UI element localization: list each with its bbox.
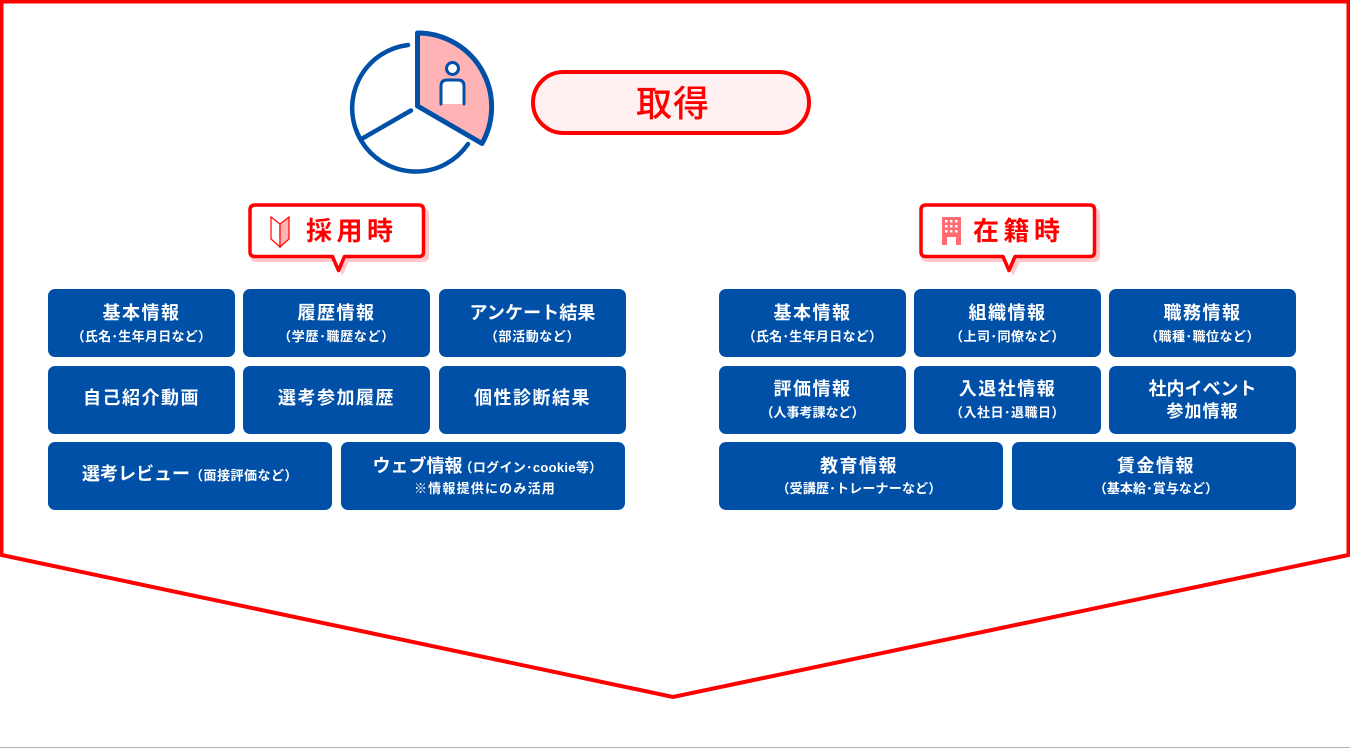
speech bubble: 在籍時 (919, 203, 1100, 276)
item: 賃金情報: 賃金情報 (1117, 456, 1195, 476)
item: 選考レビュー (48, 442, 332, 510)
icon: pie chart with person (350, 30, 494, 174)
label: 採用時: 採用時 (306, 216, 398, 246)
item: 入退社情報 (914, 366, 1101, 434)
panel: 在籍時 items (719, 289, 1296, 510)
item: ウェブ情報: ※情報提供にのみ活用 (414, 481, 556, 496)
item: 自己紹介動画 (48, 366, 235, 434)
item: 組織情報: （上司･同僚など） (950, 329, 1065, 344)
item: 基本情報: （氏名･生年月日など） (743, 329, 882, 344)
label: 在籍時: 在籍時 (973, 216, 1065, 246)
item: 基本情報 (719, 289, 906, 357)
item: 組織情報 (914, 289, 1101, 357)
item: 賃金情報 (1012, 442, 1296, 510)
item: アンケート結果: （部活動など） (485, 329, 580, 344)
item: 入退社情報: （入社日･退職日） (950, 405, 1065, 420)
item: 社内イベント参加情報: 社内イベント (1148, 379, 1256, 399)
item: 社内イベント参加情報 (1109, 366, 1296, 434)
item: 入退社情報: 入退社情報 (959, 379, 1056, 399)
item: 基本情報: 基本情報 (774, 303, 852, 323)
item: 基本情報: （氏名･生年月日など） (72, 329, 211, 344)
item: 教育情報 (719, 442, 1003, 510)
item: 履歴情報: 履歴情報 (298, 303, 376, 323)
item: ウェブ情報 (341, 442, 625, 510)
item: 評価情報 (719, 366, 906, 434)
item: 選考参加履歴: 選考参加履歴 (278, 388, 395, 408)
heading pill: 取得: 取得 (636, 83, 710, 124)
item: 履歴情報: （学歴･職歴など） (278, 329, 395, 344)
item: 評価情報: 評価情報 (774, 379, 852, 399)
item: 組織情報: 組織情報 (968, 303, 1046, 323)
item: 基本情報 (48, 289, 235, 357)
icon: beginner mark (271, 217, 289, 247)
item: 個性診断結果 (439, 366, 626, 434)
item: 賃金情報: （基本給･賞与など） (1094, 481, 1218, 496)
item: 選考参加履歴 (243, 366, 430, 434)
item: 社内イベント参加情報: 参加情報 (1166, 402, 1238, 421)
item: 自己紹介動画: 自己紹介動画 (83, 388, 200, 408)
item: 職務情報: （職種･職位など） (1145, 329, 1260, 344)
item: 基本情報: 基本情報 (102, 303, 180, 323)
item: アンケート結果: アンケート結果 (470, 303, 595, 323)
item: ウェブ情報: ウェブ情報（ログイン･cookie等） (373, 456, 602, 476)
item: 職務情報: 職務情報 (1164, 303, 1242, 323)
speech bubble: 採用時 (248, 203, 429, 276)
item: 教育情報: 教育情報 (820, 456, 898, 476)
heading pill: 取得 (531, 70, 811, 135)
item: 選考レビュー: 選考レビュー（面接評価など） (82, 464, 298, 484)
icon: building (942, 217, 961, 245)
item: 評価情報: （人事考課など） (760, 405, 864, 420)
item: 職務情報 (1109, 289, 1296, 357)
panel: 採用時 items (48, 289, 626, 510)
item: アンケート結果 (439, 289, 626, 357)
item: 個性診断結果: 個性診断結果 (474, 388, 591, 408)
item: 履歴情報 (243, 289, 430, 357)
item: 教育情報: （受講歴･トレーナーなど） (776, 481, 942, 496)
